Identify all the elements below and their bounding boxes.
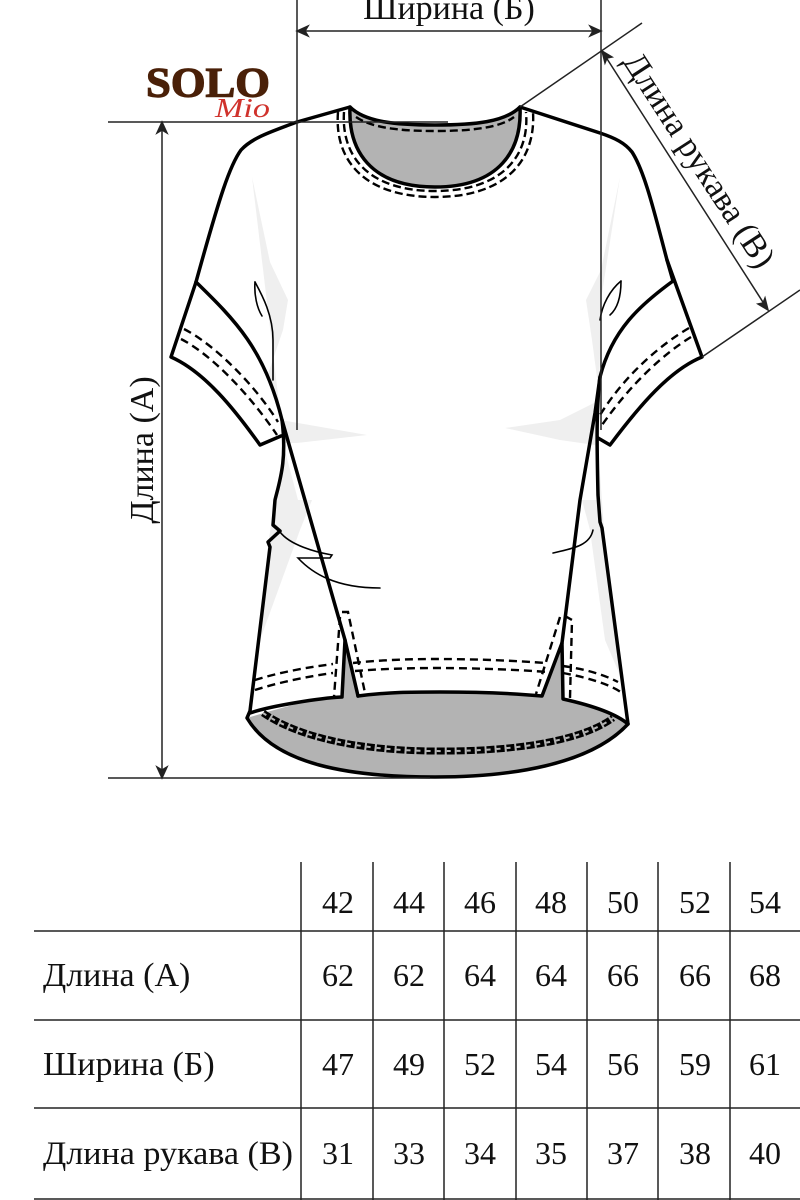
row: sleeve length V: 38 <box>679 1135 711 1171</box>
measurement lines <box>108 0 800 778</box>
row: sleeve length V: Длина рукава (В) <box>43 1136 293 1172</box>
header row: sizes: 46 <box>464 884 496 920</box>
header row: sizes: 44 <box>393 884 425 920</box>
row: length A: Длина (А) <box>43 957 190 994</box>
arrow: width B <box>297 26 601 36</box>
hem chain stitch <box>263 713 613 751</box>
header row: sizes: 52 <box>679 884 711 920</box>
row: sleeve length V: 40 <box>749 1135 781 1171</box>
sleeve and hem stitching <box>181 328 691 698</box>
row: length A: 66 <box>607 957 639 993</box>
neckline stitching <box>338 112 533 197</box>
size table <box>34 862 800 1200</box>
logo: Solo Mio: Mio <box>214 93 270 123</box>
header row: sizes: 48 <box>535 884 567 920</box>
logo: Solo Mio: SOLO <box>146 61 270 107</box>
row: length A: 66 <box>679 957 711 993</box>
row: length A: 68 <box>749 957 781 993</box>
row: length A: 64 <box>535 957 567 993</box>
row: width B: 52 <box>464 1046 496 1082</box>
header row: sizes: 50 <box>607 884 639 920</box>
row: length A: 62 <box>393 957 425 993</box>
header row: sizes: 42 <box>322 884 354 920</box>
row: width B: 59 <box>679 1046 711 1082</box>
row: width B: 47 <box>322 1046 354 1082</box>
label: sleeve length V: Длина рукава (В) <box>615 46 782 275</box>
row: width B: 49 <box>393 1046 425 1082</box>
row: length A: 62 <box>322 957 354 993</box>
row: sleeve length V: 31 <box>322 1135 354 1171</box>
fold lines <box>255 281 621 588</box>
hem underside <box>247 640 628 777</box>
row: sleeve length V: 37 <box>607 1135 639 1171</box>
garment outline <box>171 107 702 777</box>
row: sleeve length V: 35 <box>535 1135 567 1171</box>
header row: sizes: 54 <box>749 884 781 920</box>
arrow: sleeve length V <box>602 51 768 310</box>
row: width B: 56 <box>607 1046 639 1082</box>
label: length A: Длина (А) <box>124 376 161 524</box>
table grid <box>34 862 800 1200</box>
logo: Solo Mio <box>146 61 270 123</box>
row: width B: 54 <box>535 1046 567 1082</box>
row: sleeve length V: 34 <box>464 1135 496 1171</box>
garment shading <box>252 177 622 680</box>
row: width B: Ширина (Б) <box>43 1046 215 1083</box>
row: width B <box>43 1046 781 1083</box>
arrow: length A <box>157 122 167 778</box>
header row: sizes <box>322 884 781 920</box>
row: length A <box>43 957 781 994</box>
row: sleeve length V: 33 <box>393 1135 425 1171</box>
row: length A: 64 <box>464 957 496 993</box>
neckline opening <box>350 107 520 187</box>
t-shirt technical drawing <box>171 107 702 777</box>
row: sleeve length V <box>43 1135 781 1172</box>
row: width B: 61 <box>749 1046 781 1082</box>
